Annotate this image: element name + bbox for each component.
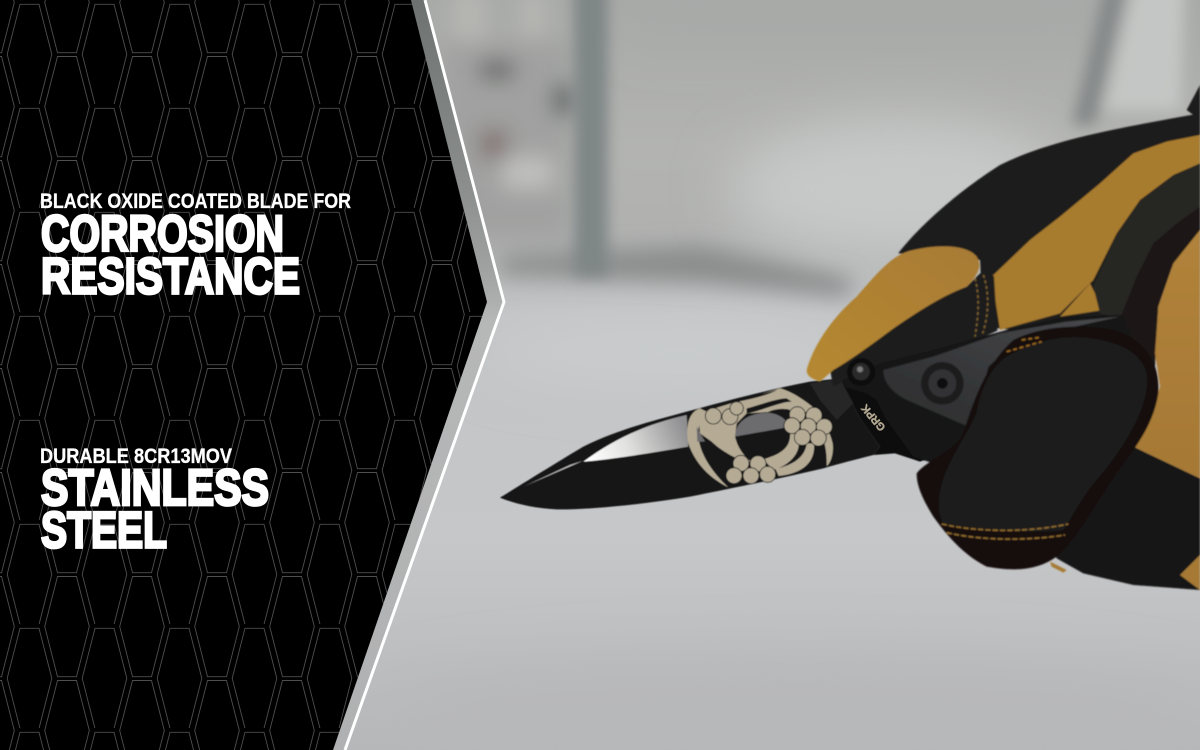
text block: stainless steel: DURABLE 8CR13MOV — [40, 444, 233, 468]
glove: thumb outer — [917, 327, 1158, 569]
medallion grey wedge — [697, 427, 705, 442]
blade speckled hub — [810, 379, 853, 420]
knife: tang joining handle — [840, 373, 937, 462]
text block: stainless steel: STAINLESS — [41, 459, 269, 516]
photo: gloved hand — [807, 85, 1200, 590]
text block: corrosion resistance: CORROSION — [41, 205, 284, 262]
glove: black wrist ring — [1100, 207, 1200, 367]
glove: back black fabric — [898, 113, 1200, 340]
glove: dark seam — [1093, 163, 1200, 318]
blade bevel — [583, 415, 688, 462]
chevron white line — [345, 0, 504, 750]
chevron side band — [333, 0, 505, 750]
medallion grey half-disc — [735, 413, 790, 437]
medallion crescents — [687, 408, 728, 487]
blade body — [500, 378, 880, 509]
blade logo text: GRPK — [859, 402, 888, 433]
photo: knife blade — [500, 373, 937, 509]
blade medallion — [687, 388, 833, 487]
glove: finger tan pad — [807, 246, 979, 382]
text block: corrosion resistance: RESISTANCE — [41, 248, 300, 304]
glove: main tan panel — [992, 135, 1200, 330]
text block: stainless steel: STEEL — [41, 502, 167, 558]
glove: thumb stitching — [942, 524, 1068, 539]
black panel with hexagon pattern — [0, 0, 487, 750]
text block: corrosion resistance: BLACK OXIDE COATED BLADE FOR — [40, 189, 351, 213]
glove: finger stitching — [975, 275, 988, 337]
medallion circle clusters — [705, 402, 832, 484]
medallion dark streaks — [730, 390, 777, 403]
text block: stainless steel — [40, 444, 269, 558]
glove: top tip — [1187, 85, 1200, 120]
knife: handle plate — [883, 317, 1120, 426]
knife: handle — [843, 315, 1133, 463]
knife: thumb stud — [847, 358, 875, 386]
glove: palm tan — [1133, 230, 1200, 478]
knife: screw — [921, 362, 964, 405]
text block: corrosion resistance — [40, 189, 351, 304]
glove: lower black — [1053, 447, 1200, 590]
glove: thumb textured pad — [939, 337, 1147, 531]
glove: finger black under pad — [830, 273, 997, 387]
